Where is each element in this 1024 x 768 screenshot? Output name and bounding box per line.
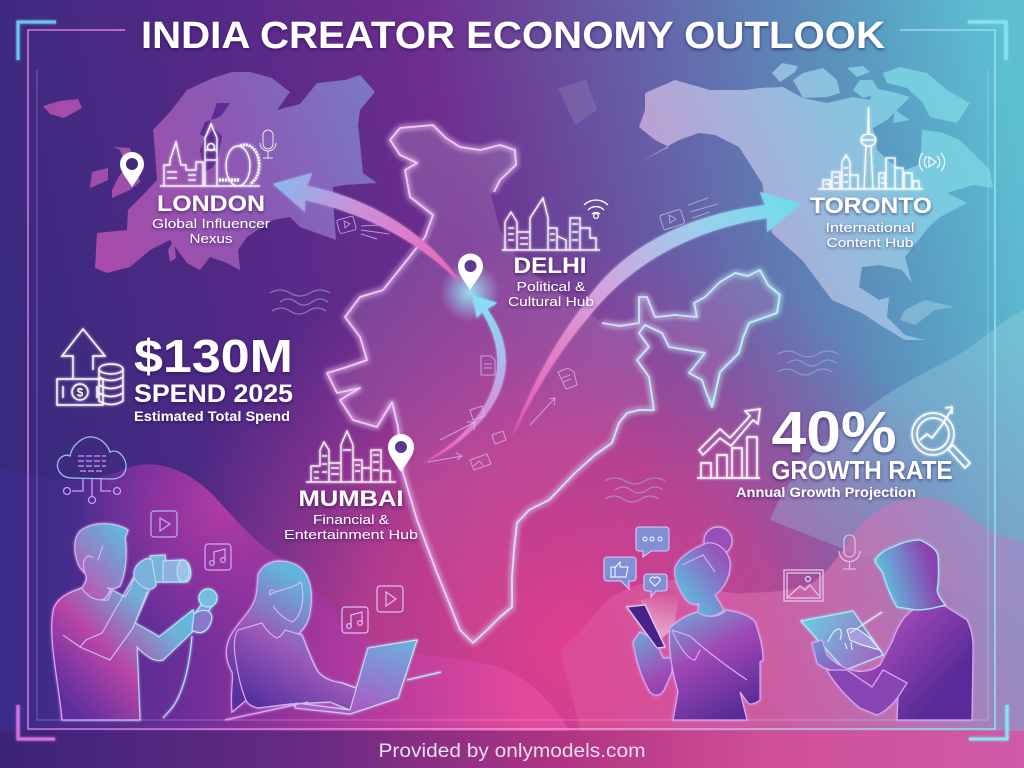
icon: chat bubbles	[604, 527, 669, 597]
caption line: Cultural Hub: Cultural Hub	[508, 294, 594, 309]
caption: Toronto: International	[826, 220, 915, 235]
ear	[83, 545, 103, 573]
head	[875, 540, 945, 610]
scribble	[828, 629, 852, 650]
footer credit: Provided by onlymodels.com	[378, 741, 646, 762]
location: Toronto	[810, 107, 945, 250]
pin: Mumbai	[388, 434, 414, 472]
icon: play tile 2	[377, 586, 403, 612]
location: Mumbai	[284, 431, 418, 542]
label: London: LONDON	[157, 191, 265, 216]
camera	[134, 555, 191, 589]
phone	[627, 605, 665, 648]
title: INDIA CREATOR ECONOMY OUTLOOK	[141, 15, 886, 57]
arm lines	[672, 630, 747, 680]
stat value: 40%: 40%	[772, 400, 896, 465]
stat caption: spend: Estimated Total Spend	[134, 409, 290, 424]
arrow: Mumbai to Delhi	[420, 295, 506, 465]
caption: Mumbai: Financial &	[313, 512, 389, 527]
icon: microphone 2	[839, 535, 860, 569]
skyline: Toronto	[818, 107, 923, 189]
icon: money and arrow	[57, 329, 123, 405]
stat: spend	[57, 329, 293, 424]
map: Europe	[43, 72, 377, 273]
map: India outline	[327, 125, 780, 643]
desk line	[225, 672, 441, 720]
icon: music tile 2	[342, 607, 368, 633]
left forearm	[633, 632, 672, 695]
caption line: Content Hub: Content Hub	[826, 235, 914, 250]
torso and arm	[52, 568, 197, 720]
icon: play tile	[151, 511, 177, 537]
small media marks along routes	[336, 198, 718, 470]
pin: London	[120, 152, 144, 187]
wave marks	[270, 290, 838, 502]
skyline: London	[160, 124, 260, 186]
head	[675, 543, 730, 616]
hand and stylus	[847, 612, 882, 650]
dollar glyph: $	[77, 386, 84, 400]
caption line: Nexus: Nexus	[190, 231, 233, 246]
illustration: woman with phone	[627, 527, 763, 720]
stat label: growth rate: GROWTH RATE	[772, 455, 952, 485]
body	[234, 623, 362, 710]
stat caption: growth: Annual Growth Projection	[736, 485, 916, 500]
torso	[669, 610, 763, 720]
illustration: photographer	[52, 524, 217, 720]
illustration: woman at laptop	[225, 561, 441, 720]
stat label: spend 2025: SPEND 2025	[134, 380, 293, 408]
glow: Delhi	[440, 262, 500, 322]
Baltic sea	[200, 103, 230, 172]
label: Mumbai: MUMBAI	[298, 486, 404, 511]
skyline: Mumbai	[306, 431, 396, 482]
elbow	[827, 670, 907, 715]
illustration: man with tablet	[801, 540, 973, 720]
arrow: to London	[273, 173, 462, 285]
footer band	[0, 731, 1024, 768]
location: Delhi	[458, 198, 608, 309]
map: North America	[639, 63, 993, 340]
light beam from phone	[640, 592, 680, 640]
icon: microphone	[260, 130, 276, 158]
microphone	[163, 589, 217, 718]
face line and ear	[269, 582, 303, 622]
label: Delhi: DELHI	[514, 253, 586, 278]
stat value: $130M: $130M	[134, 330, 293, 382]
kite mark	[558, 80, 597, 125]
icon: cloud network	[58, 437, 126, 504]
folded arm lines	[63, 575, 147, 660]
icon: broadcast	[919, 153, 945, 171]
caption: London: Global Influencer	[152, 216, 271, 231]
skyline: Delhi	[502, 198, 600, 250]
hair back	[226, 561, 311, 712]
icon: wifi	[584, 200, 608, 218]
stat: growth	[697, 400, 970, 500]
caption: Delhi: Political &	[516, 279, 586, 294]
caption line: Entertainment Hub: Entertainment Hub	[284, 527, 418, 542]
icon: magnifier chart	[912, 407, 970, 468]
laptop	[295, 640, 417, 714]
location: London	[120, 124, 276, 246]
face line	[682, 555, 715, 572]
label: Toronto: TORONTO	[810, 193, 932, 218]
icon: growth bars	[697, 409, 760, 478]
bun	[704, 527, 732, 555]
tablet	[801, 611, 883, 670]
body and arm	[812, 606, 973, 720]
icon: image frame	[784, 570, 823, 601]
pin: Delhi	[458, 253, 483, 290]
icon: music tile	[205, 544, 231, 570]
head	[75, 524, 128, 600]
arrow: to Toronto	[512, 192, 800, 437]
